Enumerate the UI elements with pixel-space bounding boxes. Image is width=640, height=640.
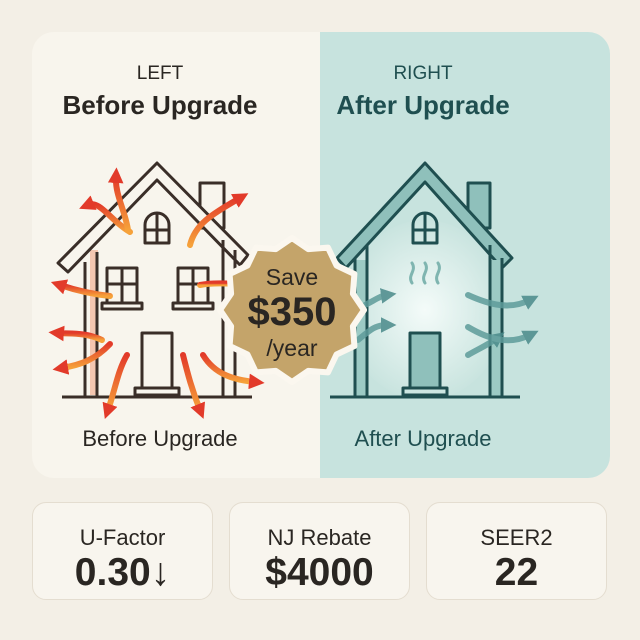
card: SEER2: 22: [495, 551, 538, 594]
card: SEER2: SEER2: [480, 525, 553, 550]
card: U-Factor: 0.30↓: [75, 551, 170, 594]
savings badge: [220, 238, 364, 382]
card: SEER2: [426, 502, 607, 600]
left heading: LEFT: [137, 63, 184, 84]
card: U-Factor: U-Factor: [80, 525, 165, 550]
house: after: [330, 163, 520, 397]
right heading: RIGHT: [393, 63, 453, 84]
savings badge: $350: [248, 290, 336, 334]
steam icon: [411, 263, 439, 283]
savings badge: Save: [266, 264, 318, 290]
right heading: After Upgrade: [336, 90, 510, 120]
bottom label before: Before Upgrade: [82, 426, 238, 451]
card: U-Factor: [32, 502, 213, 600]
heat loss arrows: [58, 177, 255, 410]
contained air arrows: [358, 295, 530, 355]
card: NJ Rebate: NJ Rebate: [268, 525, 371, 550]
card: NJ Rebate: [229, 502, 410, 600]
left heading: Before Upgrade: [62, 90, 258, 120]
house: before: [58, 163, 252, 397]
main comparison panel: [48, 32, 610, 478]
savings badge: /year: [266, 335, 318, 361]
card: NJ Rebate: $4000: [265, 551, 374, 594]
right heading: [336, 63, 510, 120]
left heading: [62, 63, 258, 120]
bottom label after: After Upgrade: [355, 426, 491, 451]
